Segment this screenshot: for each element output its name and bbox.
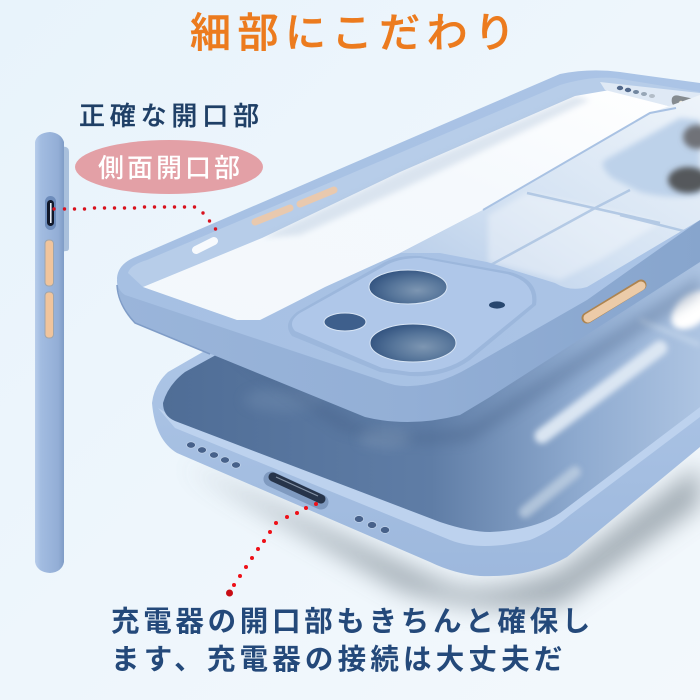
panel reflections	[487, 118, 700, 280]
side button upper	[45, 240, 54, 286]
lower case outer wall	[152, 300, 700, 576]
lens small	[324, 313, 366, 331]
clear opening	[143, 90, 676, 320]
rim button 1	[255, 208, 290, 222]
camera module	[288, 256, 536, 376]
side button lower	[45, 292, 54, 338]
flash hole	[489, 301, 505, 309]
side button on upper case	[587, 285, 641, 318]
upper phone case	[117, 70, 700, 422]
shadow under lower phone case	[185, 465, 700, 608]
title: 細部にこだわり	[190, 10, 522, 56]
side port	[45, 196, 56, 230]
lens lower	[370, 324, 456, 362]
shadow of upper case on glass	[434, 276, 700, 442]
rim button 2	[300, 190, 334, 204]
glass reflections	[243, 283, 700, 512]
caption: 充電器の開口部もきちんと確保し	[111, 606, 594, 638]
side view of the case	[35, 132, 69, 573]
lower case front band	[158, 407, 700, 546]
upper case side wall	[117, 215, 700, 422]
lens upper	[369, 270, 447, 304]
case interior wall	[128, 78, 700, 320]
caption: ます、充電器の接続は大丈夫だ	[111, 644, 567, 676]
rim silent switch slot	[196, 241, 214, 250]
dotted leader: charging port	[226, 502, 318, 596]
side opening badge	[75, 140, 263, 194]
upper case clear back panel	[400, 95, 700, 289]
rear wall with speaker and port	[600, 82, 700, 112]
charging port	[271, 477, 321, 502]
upper case top surface	[117, 70, 700, 386]
speaker holes right	[354, 516, 390, 533]
side opening badge: 側面開口部	[98, 153, 243, 183]
caption	[111, 606, 594, 676]
lower case glass back	[163, 200, 700, 532]
dotted leader: side opening	[52, 205, 217, 231]
lower phone case	[152, 262, 700, 576]
heading: precise openings: 正確な開口部	[79, 101, 264, 131]
speaker holes left	[187, 442, 240, 468]
panel edge line	[483, 108, 676, 210]
